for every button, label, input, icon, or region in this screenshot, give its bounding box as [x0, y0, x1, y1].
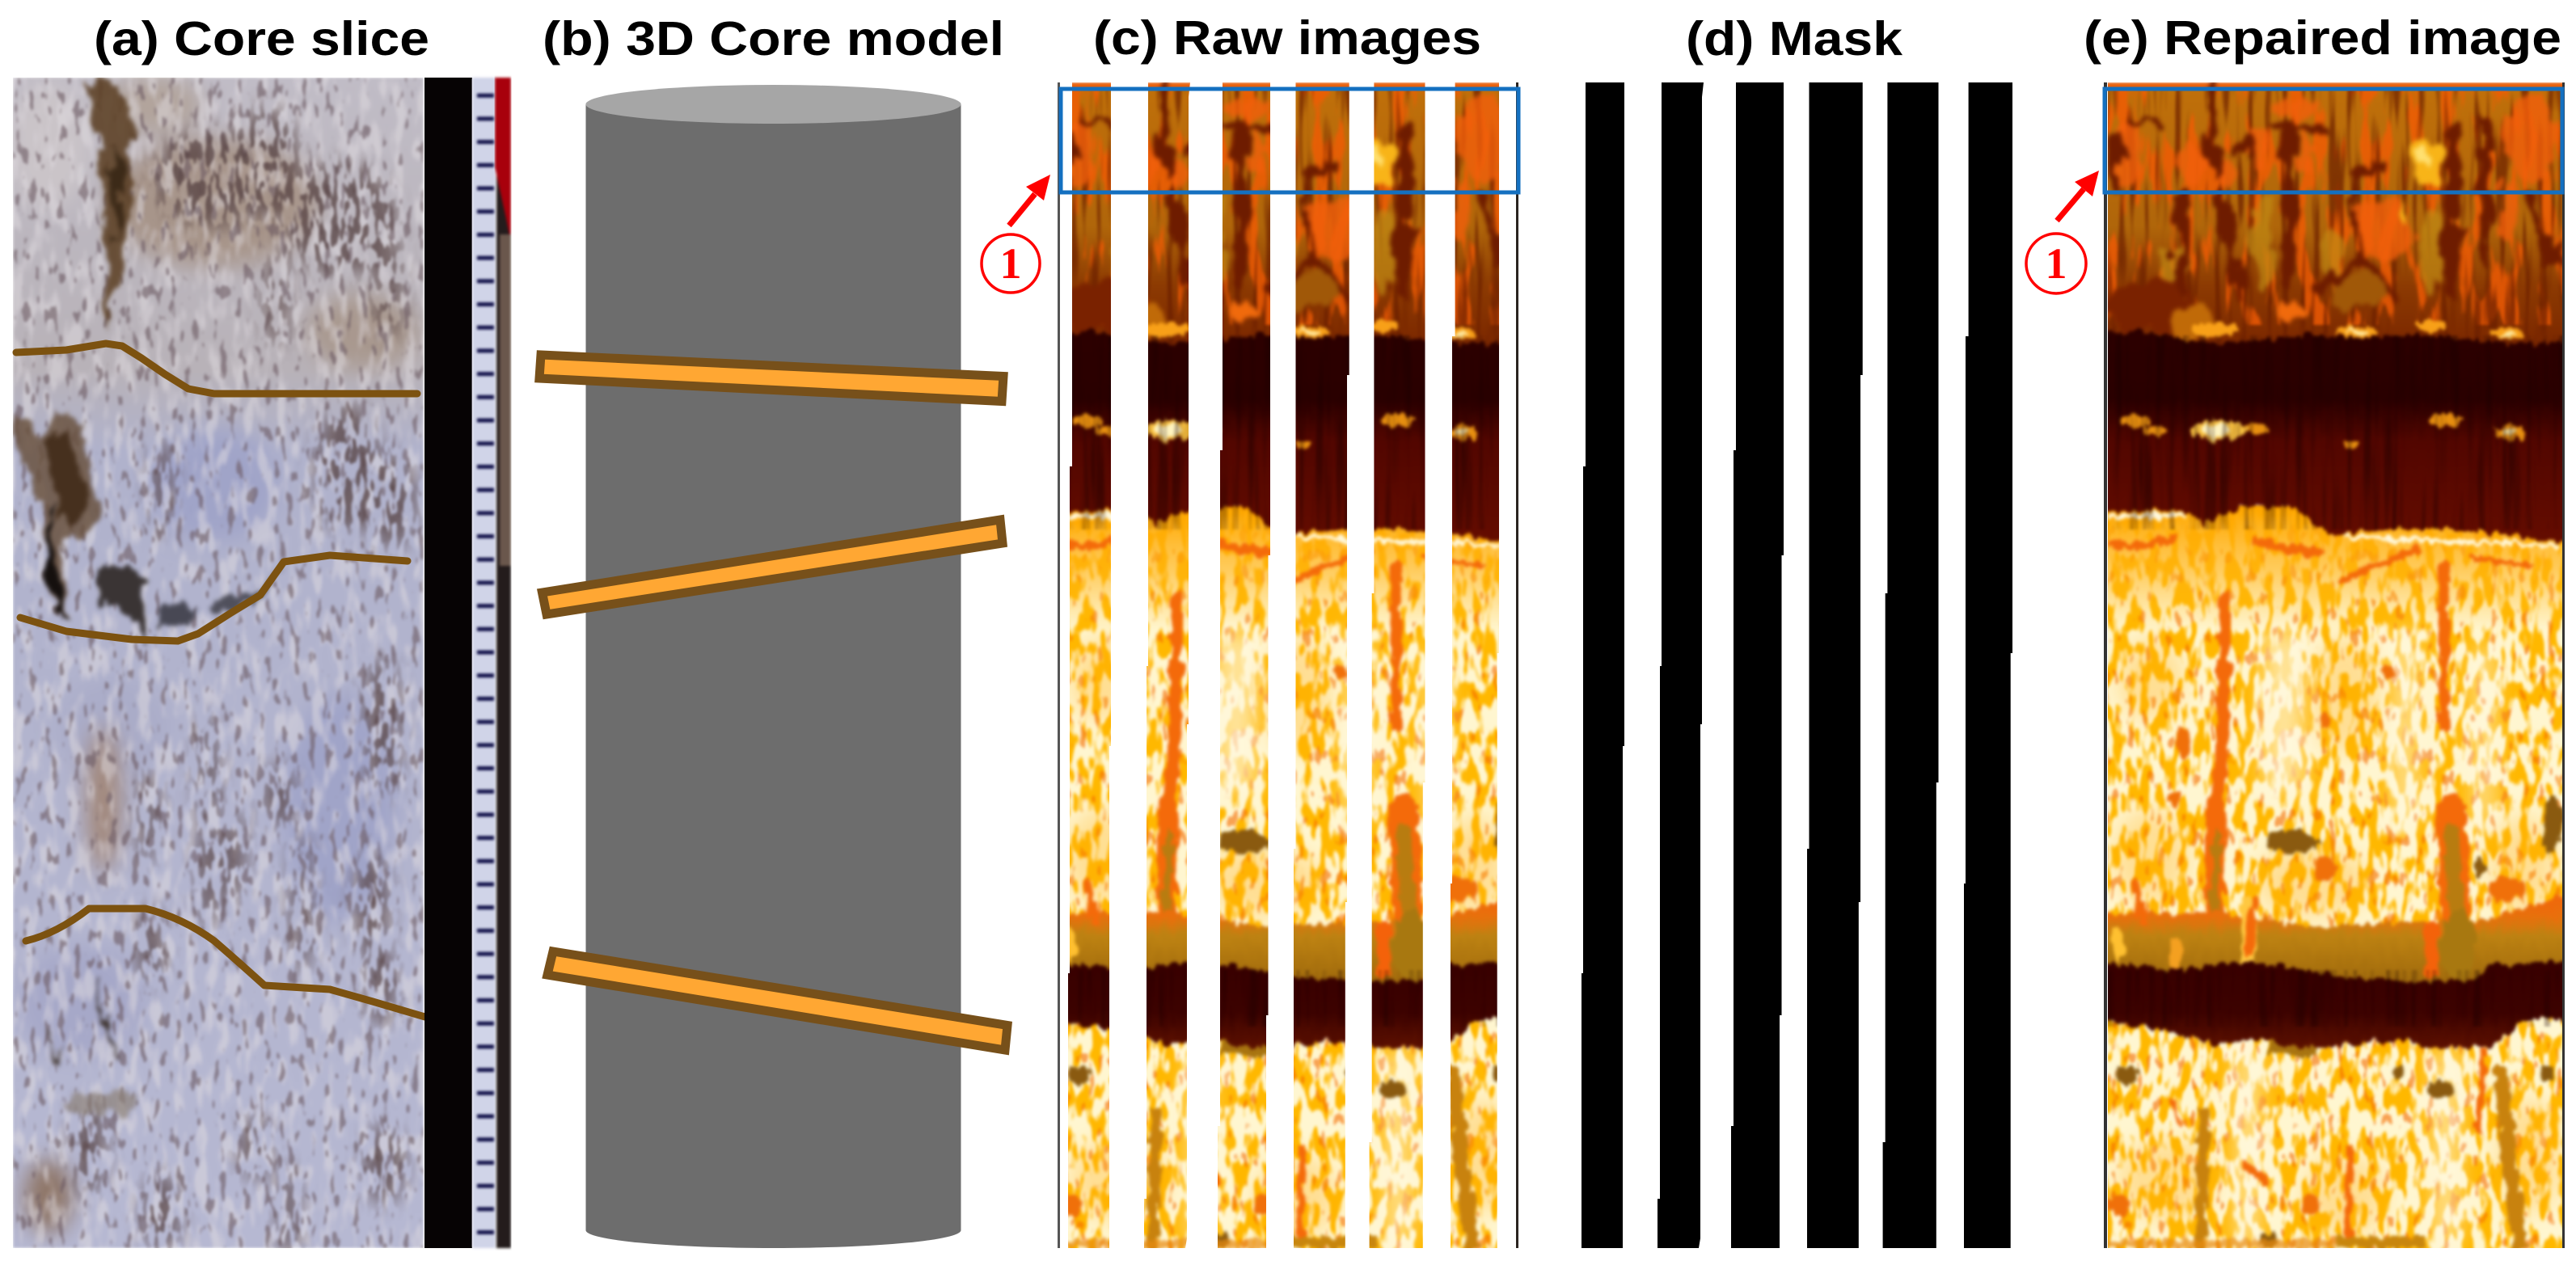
heading e: (e) Repaired image [2084, 11, 2561, 65]
circled marker 2 [2026, 234, 2086, 293]
red and brown edge strip [495, 78, 511, 1248]
repaired image [2094, 82, 2575, 1253]
circled marker 1 [982, 234, 1040, 293]
frame lines [2104, 82, 2565, 1248]
fracture traces on slice [16, 344, 428, 1018]
panel b: 3D core model [539, 12, 1007, 1248]
blue highlight box 1 [1061, 89, 1518, 192]
circled marker 2: 1 [2046, 239, 2067, 288]
circled marker 1: 1 [999, 239, 1022, 288]
heading d: (d) Mask [1686, 12, 1902, 65]
black core tray edge [424, 78, 472, 1248]
fracture plane 2 [542, 520, 1003, 614]
core slice photograph [8, 76, 424, 1261]
red arrow 2 [2057, 171, 2099, 221]
panel a: core slice [8, 12, 511, 1261]
heading c: (c) Raw images [1093, 11, 1481, 65]
panel c: raw images [982, 11, 1527, 1253]
red arrow 1 [1009, 175, 1050, 226]
blue highlight box 2 [2105, 89, 2562, 192]
raw image strips [1068, 82, 1499, 1248]
fracture plane 1 [539, 355, 1003, 401]
panel d: mask [1581, 12, 2012, 1248]
fracture plane 3 [547, 951, 1007, 1050]
frame lines [1058, 82, 1518, 1248]
heading b: (b) 3D Core model [543, 12, 1004, 65]
ruler [472, 78, 496, 1248]
grey cylinder [585, 85, 961, 1248]
panel e: repaired image [2026, 11, 2575, 1253]
mask bars [1581, 82, 2012, 1248]
heading a: (a) Core slice [94, 12, 429, 65]
